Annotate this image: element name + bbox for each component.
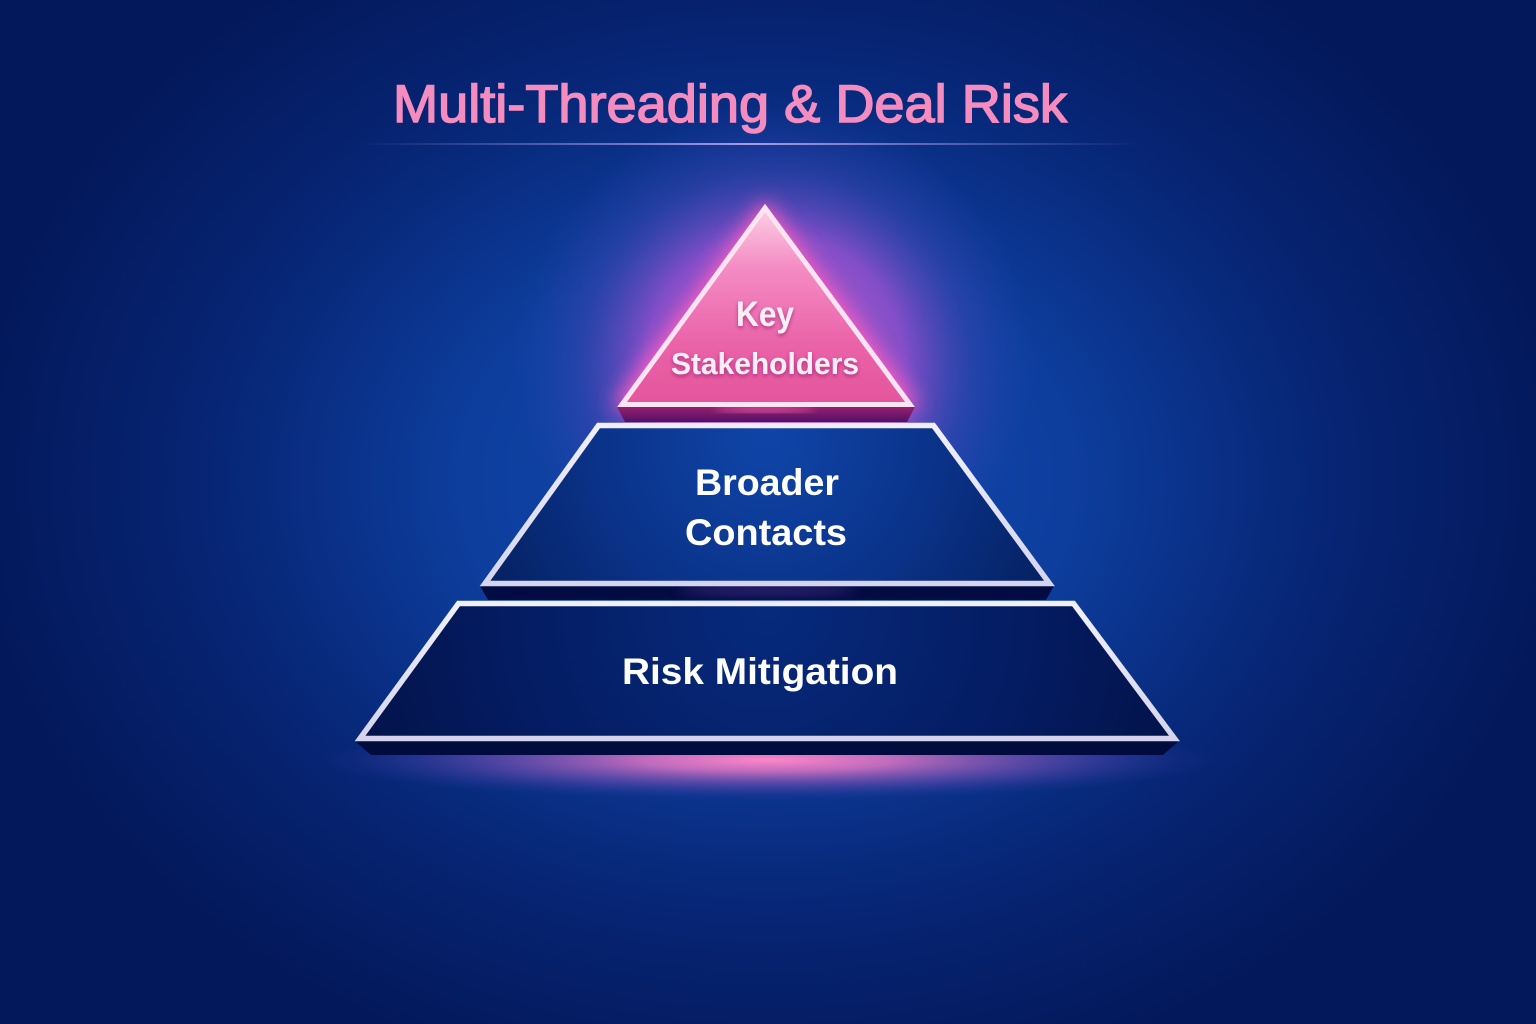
apex side face [617, 407, 915, 422]
tier 3 label: Risk Mitigation [622, 651, 898, 692]
tier 3 top face [360, 604, 1174, 738]
tier 2 label: Broader [695, 462, 839, 503]
tier: risk mitigation [355, 604, 1179, 755]
tier 2 top face [485, 426, 1050, 584]
floor glow [318, 720, 1218, 800]
apex neon glow [611, 200, 921, 408]
apex label: Key [736, 295, 794, 334]
title underline [360, 143, 1140, 145]
tier 2 lower glow [677, 586, 857, 594]
tier: key stakeholders: Stakeholders [671, 346, 859, 381]
tier: key stakeholders [611, 200, 921, 422]
apex base highlight [715, 408, 815, 412]
title: Multi-Threading & Deal Risk [393, 75, 1067, 134]
tier 3 side face [355, 741, 1179, 755]
tier 2 side face [480, 586, 1054, 600]
glow behind apex [510, 100, 1040, 630]
tier: broader contacts: Contacts [685, 512, 847, 553]
apex face [622, 208, 910, 404]
tier: broader contacts [480, 426, 1054, 600]
